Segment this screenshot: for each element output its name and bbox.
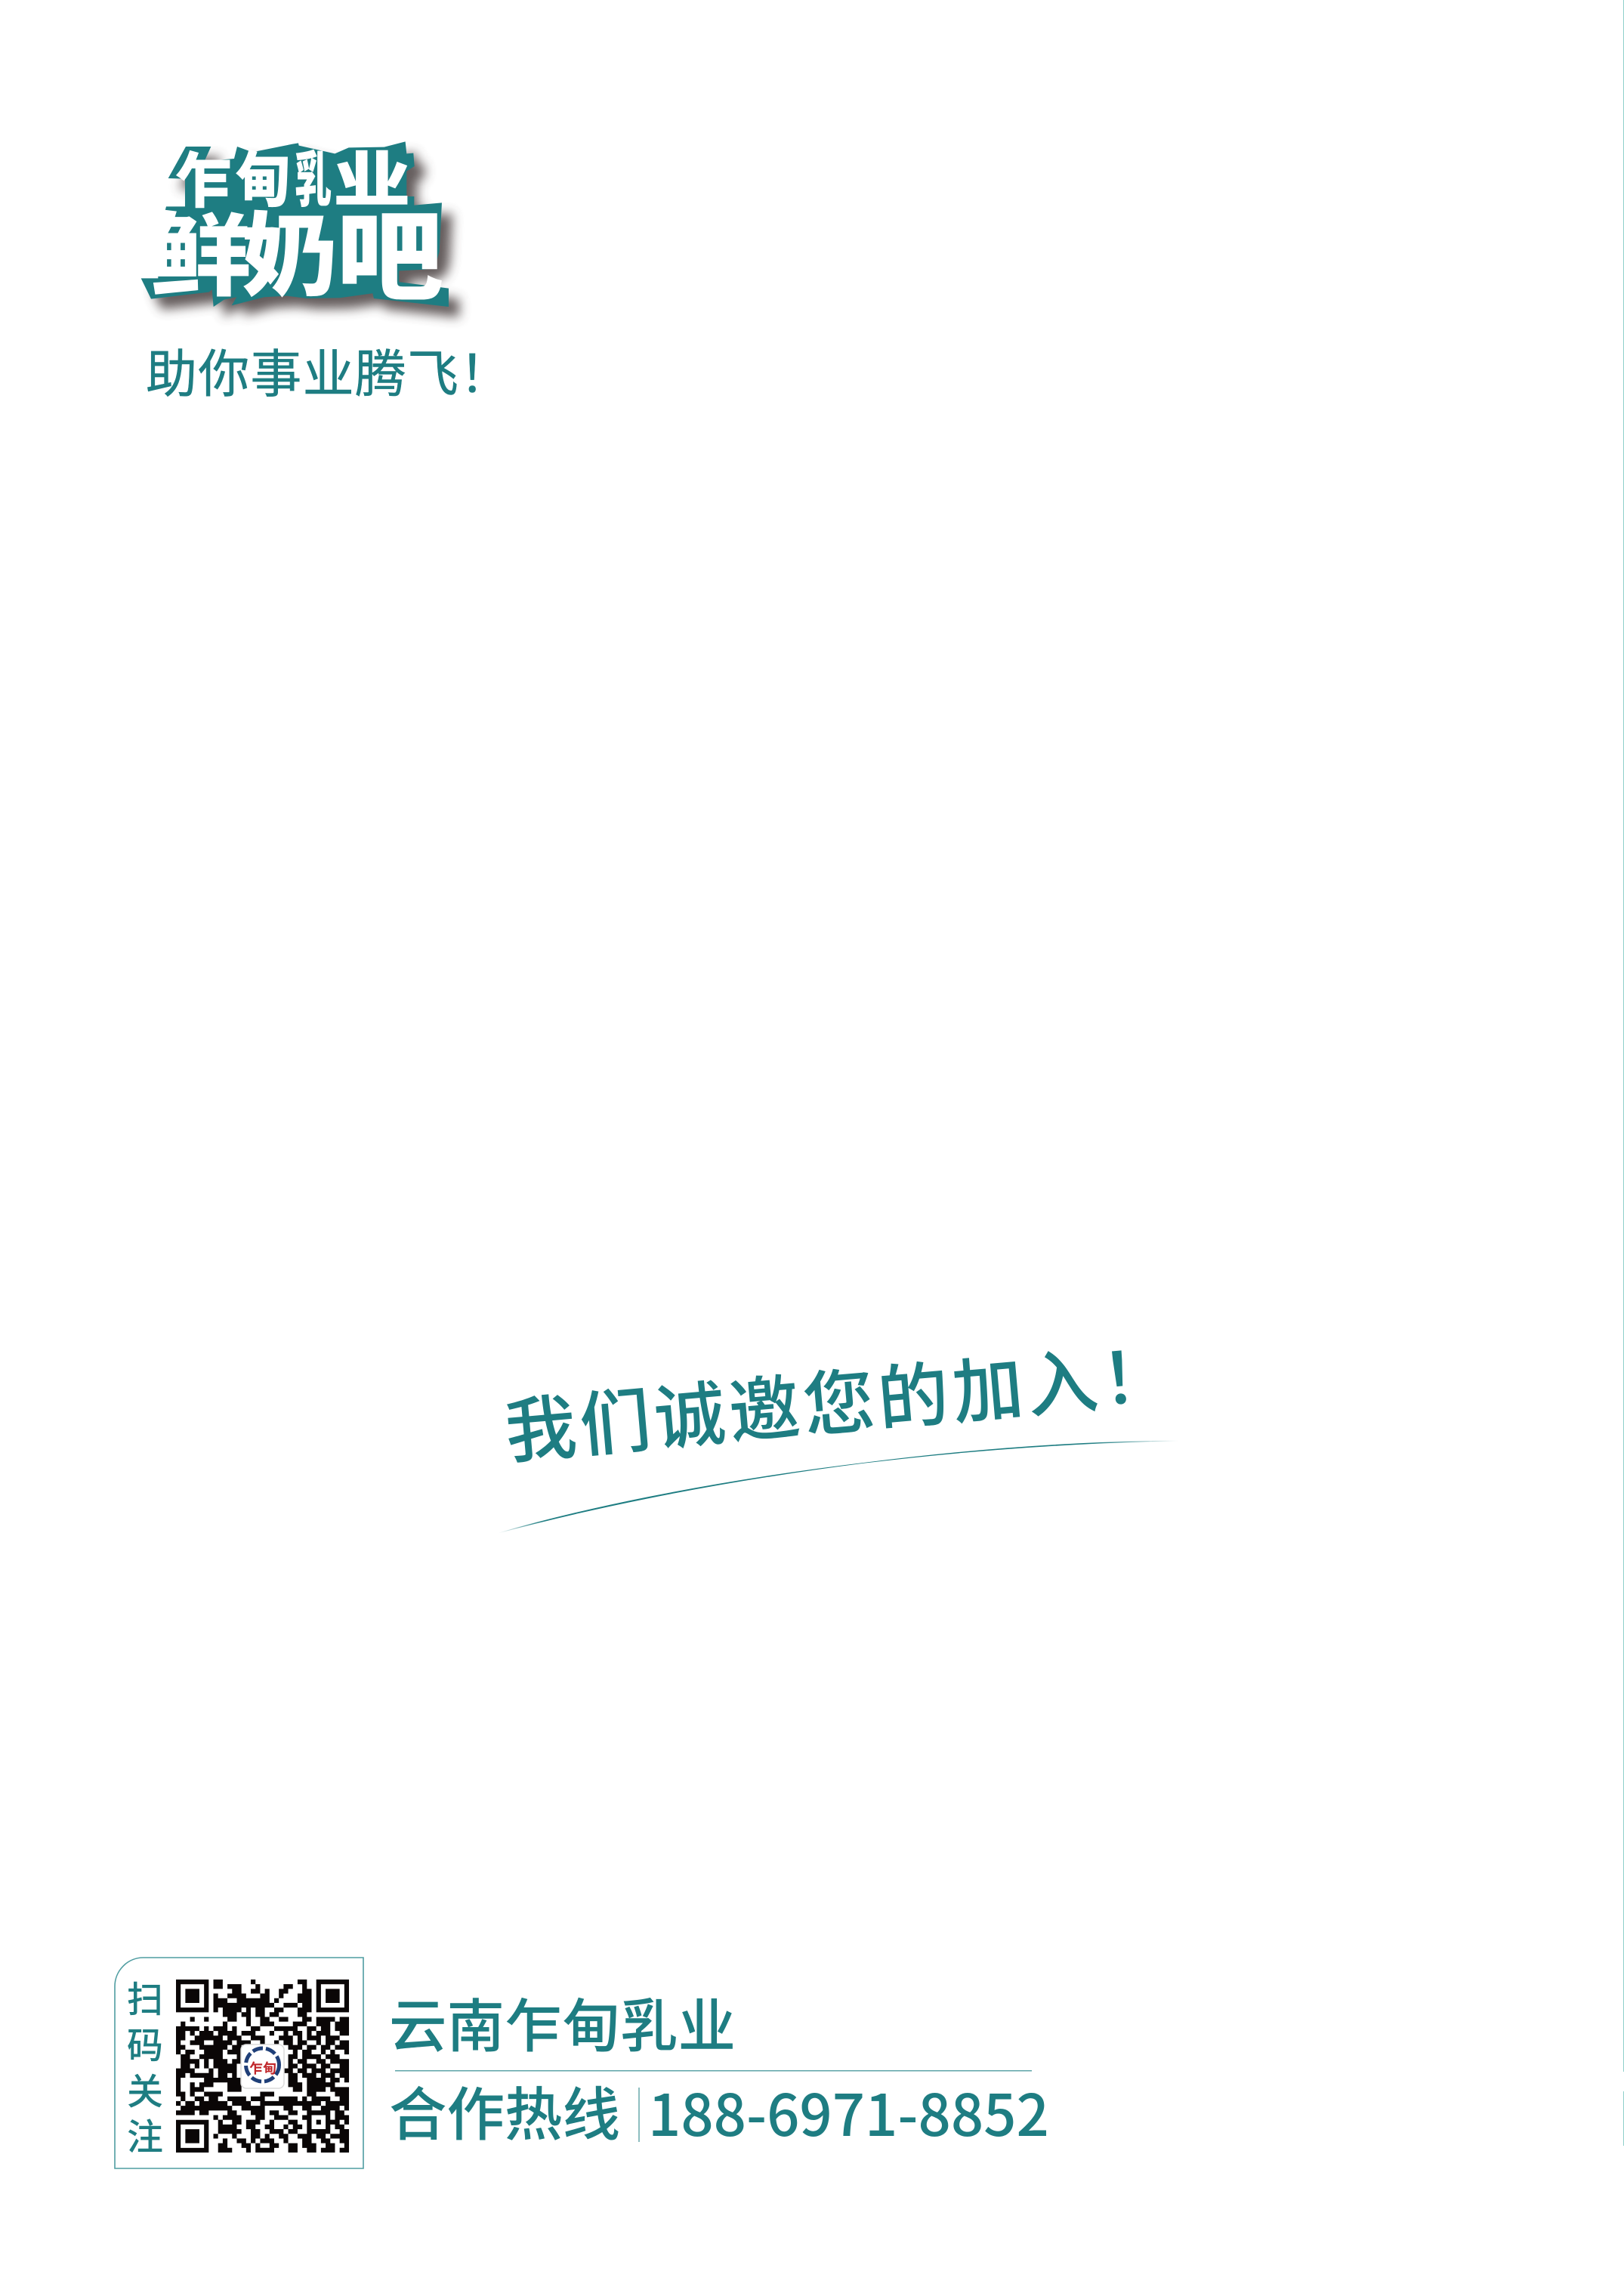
logo lettering: 甸 bbox=[235, 132, 291, 220]
company name: 云南乍甸乳业 bbox=[389, 1980, 736, 2064]
scan label: 关 bbox=[127, 2062, 163, 2115]
right edge accent strip bbox=[1623, 0, 1624, 2146]
logo shadow bbox=[152, 152, 459, 317]
hotline separator bbox=[639, 2088, 640, 2142]
scan label: 注 bbox=[127, 2107, 163, 2160]
QR centre badge bbox=[241, 2044, 284, 2088]
QR code bbox=[176, 1980, 349, 2153]
logo lettering: 吧 bbox=[336, 178, 443, 320]
panel border bbox=[115, 1958, 363, 2168]
scan label: 扫 bbox=[127, 1970, 163, 2023]
logo: 乍甸乳业 鲜奶吧 bbox=[141, 131, 459, 320]
logo lettering: 鲜 bbox=[149, 183, 251, 314]
hotline number: 188-6971-8852 bbox=[648, 2069, 1049, 2153]
logo lettering: 奶 bbox=[242, 182, 338, 315]
invitation heading: 我们诚邀您的加入！ bbox=[501, 1318, 1180, 1479]
logo lettering: 乳 bbox=[295, 132, 332, 220]
logo lettering bbox=[149, 131, 443, 320]
contact divider bbox=[395, 2070, 1032, 2072]
logo lettering: 乍 bbox=[174, 131, 233, 220]
scan label: 码 bbox=[127, 2016, 163, 2069]
logo teal silhouette bbox=[141, 141, 449, 307]
logo lettering: 业 bbox=[333, 131, 411, 219]
tagline: 助你事业腾飞！ bbox=[146, 332, 511, 407]
curved swoosh underline bbox=[499, 1441, 1178, 1533]
scan label bbox=[127, 1970, 163, 2160]
QR centre badge: 乍甸 bbox=[249, 2058, 276, 2078]
QR panel bbox=[115, 1958, 363, 2168]
hotline label: 合作热线 bbox=[389, 2069, 620, 2153]
